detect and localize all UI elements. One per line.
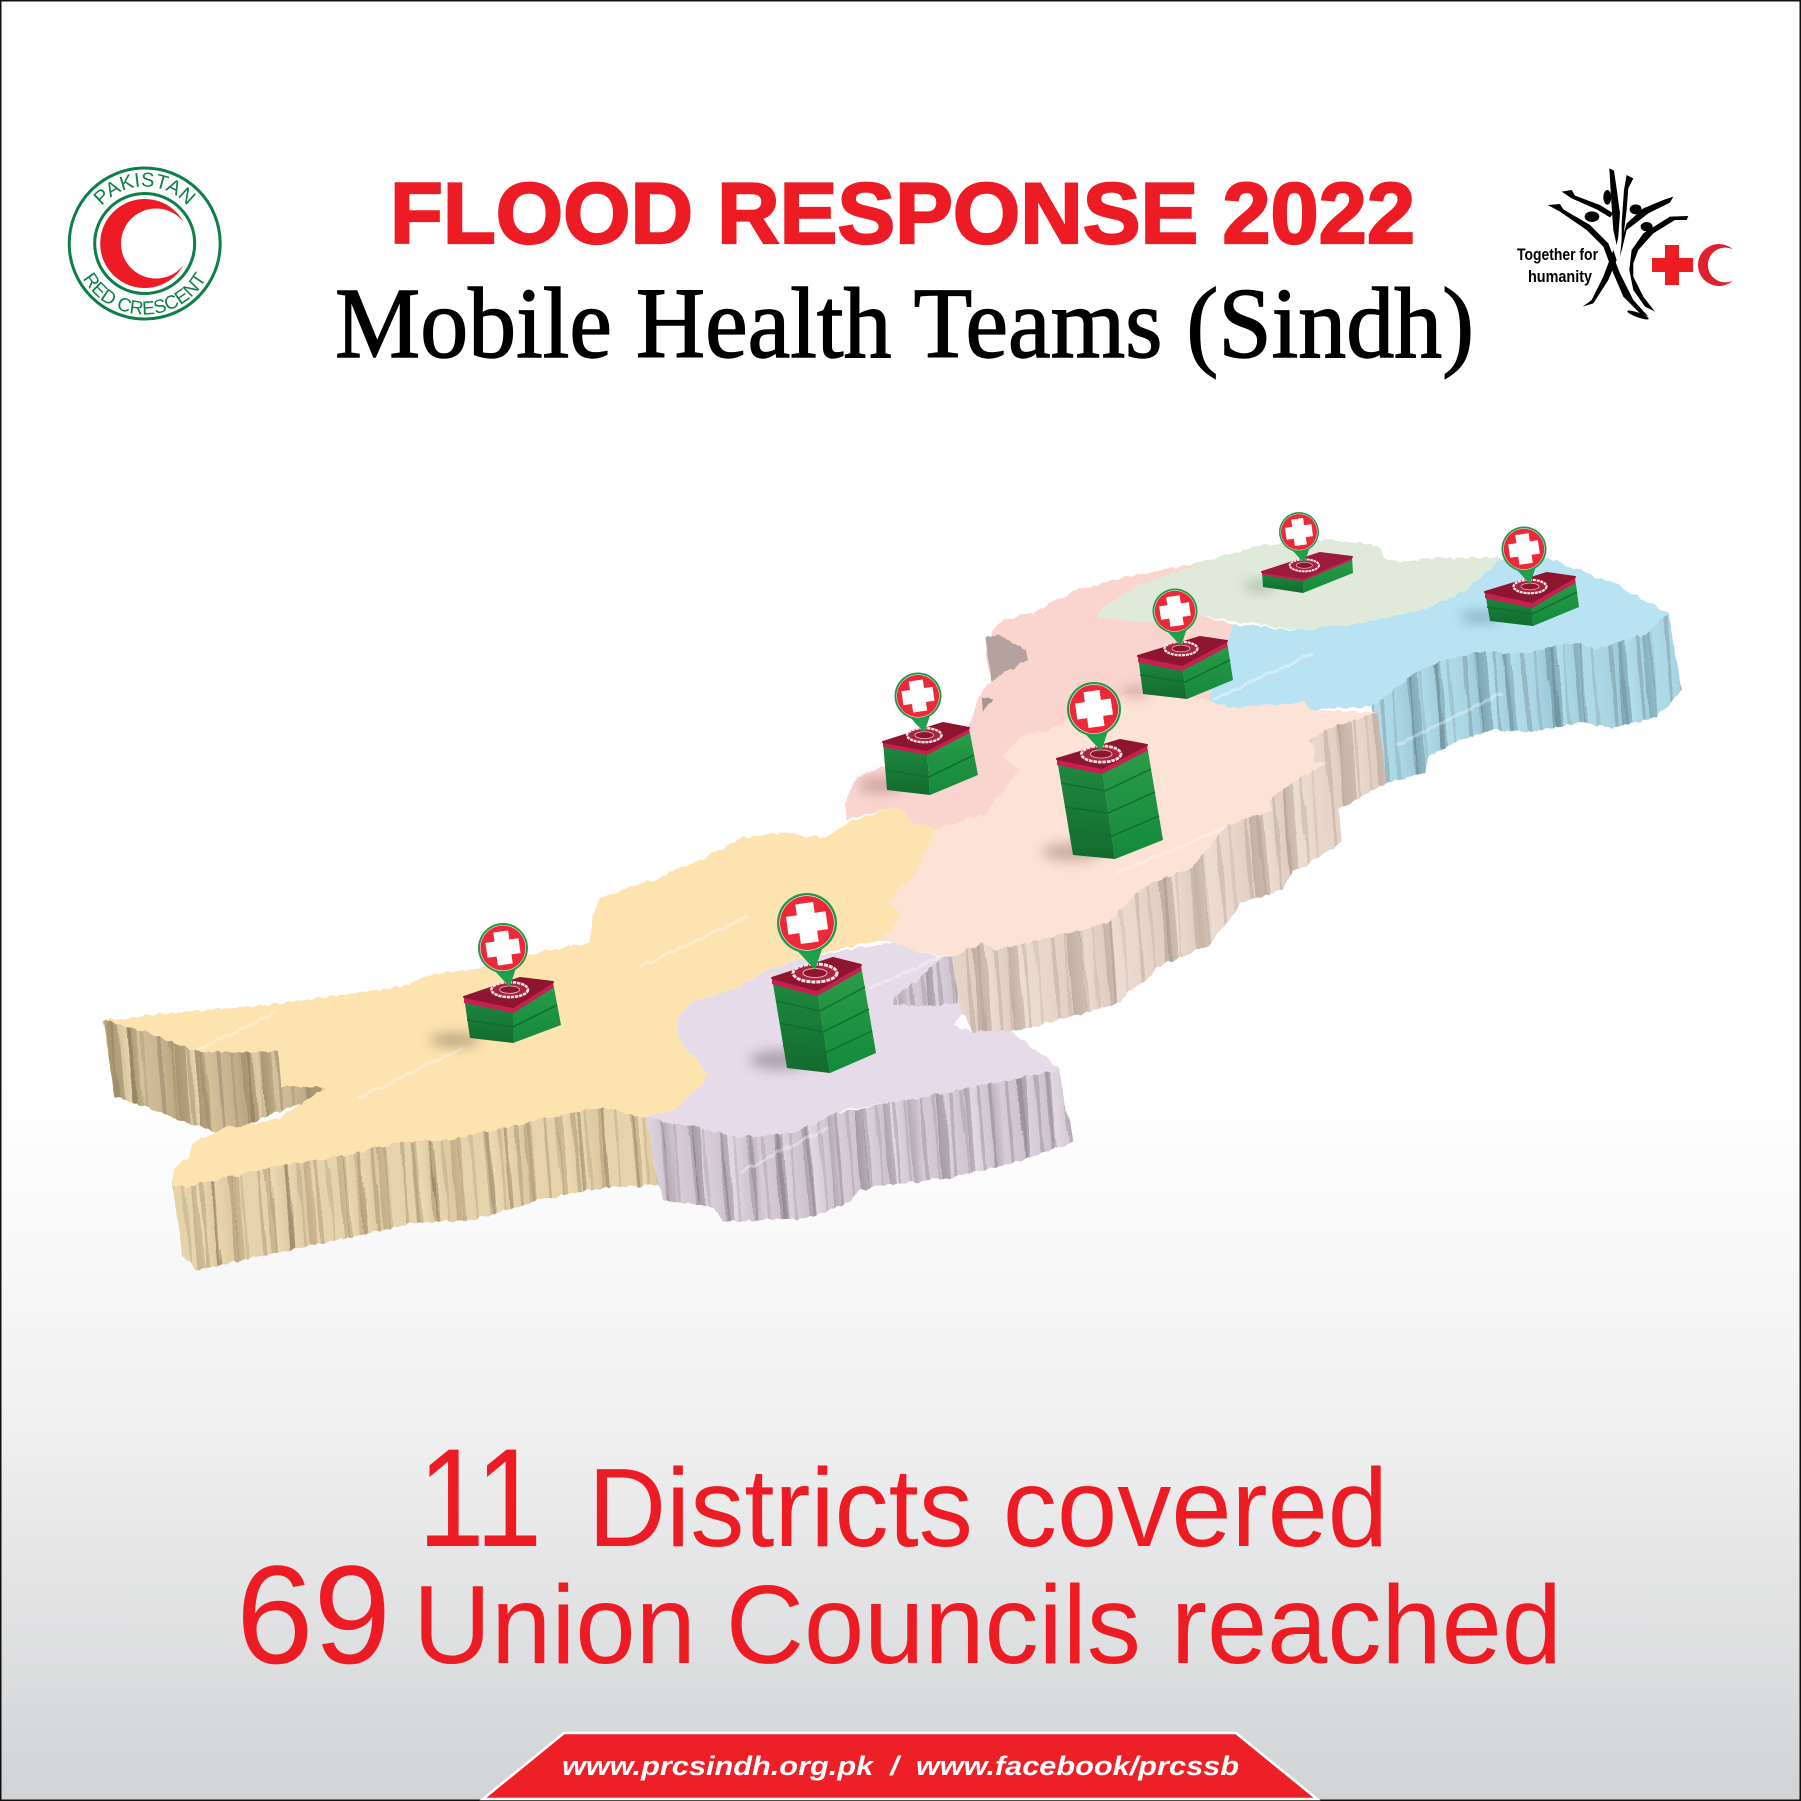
logo: Pakistan Red Crescent [68, 166, 222, 320]
stat: 11 Districts covered [418, 1419, 1388, 1576]
icon: dancing figures tree [1548, 168, 1688, 321]
region: Gilgit-Baltistan [1097, 540, 1503, 630]
marker: Azad Kashmir stack [1460, 526, 1579, 626]
region: Punjab [880, 693, 1377, 957]
footer banner [483, 1733, 1317, 1799]
marker: Khyber Pakhtunkhwa north stack [1121, 588, 1233, 699]
text: Together for humanity: humanity [1528, 267, 1592, 286]
3D map of Pakistan [103, 540, 1683, 1270]
logo: Pakistan Red Crescent: PAKISTAN [93, 172, 196, 205]
wall: Kashmir / Gilgit east [1372, 613, 1683, 783]
marker: Khyber Pakhtunkhwa west stack [858, 673, 978, 795]
icon: red cross [1652, 245, 1693, 285]
title: FLOOD RESPONSE 2022 [390, 166, 1415, 262]
marker: Sindh stack [750, 893, 876, 1073]
stat: 69 Union Councils reached: Union Councils reached [413, 1563, 1562, 1687]
stat: 69 Union Councils reached: 69 [236, 1536, 391, 1693]
wall: Sindh [647, 1070, 1073, 1222]
faint watermark lines [197, 653, 1503, 1172]
wall: Khyber Pakhtunkhwa notches [980, 635, 1027, 712]
text: Together for humanity [1517, 245, 1598, 286]
marker: Gilgit-Baltistan stack [1244, 512, 1353, 593]
region: Khyber Pakhtunkhwa [845, 562, 1233, 828]
stat: 11 Districts covered: Districts covered [588, 1446, 1388, 1570]
logo: Together for humanity [1517, 168, 1733, 321]
region: Azad Kashmir [1208, 558, 1668, 710]
wall: Balochistan north-west [103, 1020, 327, 1133]
region: Balochistan [103, 808, 937, 1187]
subtitle: Mobile Health Teams (Sindh) [335, 267, 1474, 379]
wall: Punjab [950, 712, 1387, 1032]
wall: Balochistan south [173, 1103, 658, 1270]
icon: red crescent [1698, 244, 1733, 286]
wall: Sindh inner notch [893, 957, 960, 1006]
logo: Pakistan Red Crescent: RED CRESCENT [83, 271, 204, 315]
marker: Punjab stack [1042, 682, 1163, 861]
stat: 69 Union Councils reached [236, 1536, 1562, 1693]
region: Sindh [647, 942, 1060, 1137]
footer links: www.prcsindh.org.pk / www.facebook/prcssb [562, 1751, 1239, 1781]
marker: Balochistan stack [430, 923, 561, 1047]
text: Together for humanity: Together for [1517, 245, 1598, 264]
stat: 11 Districts covered: 11 [418, 1419, 542, 1576]
